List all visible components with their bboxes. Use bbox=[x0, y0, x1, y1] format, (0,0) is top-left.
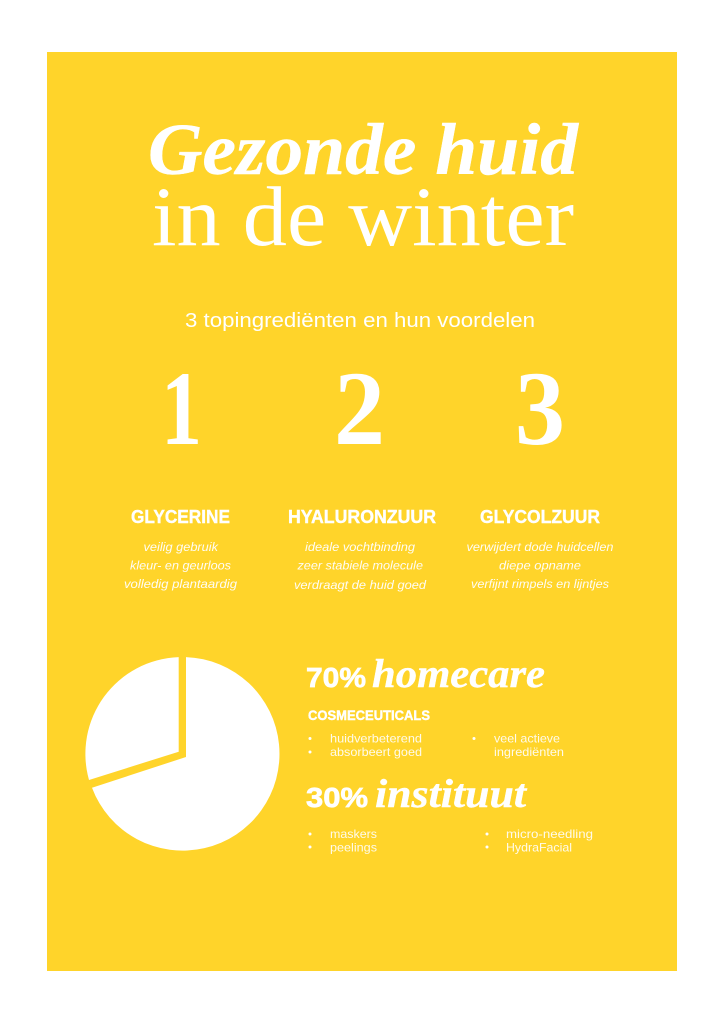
section: homecare: 70% bbox=[306, 662, 366, 693]
column: hyaluronzuur: ideale vochtbinding bbox=[305, 540, 415, 554]
column: glycolzuur: GLYCOLZUUR bbox=[480, 507, 600, 527]
section: instituut: HydraFacial bbox=[506, 840, 572, 854]
column: glycerine: 1 bbox=[161, 350, 202, 467]
column: hyaluronzuur: verdraagt de huid goed bbox=[294, 578, 426, 592]
yellow background panel bbox=[47, 52, 677, 971]
column: glycerine: GLYCERINE bbox=[131, 507, 230, 527]
section: instituut: micro-needling bbox=[506, 827, 593, 841]
column: glycerine: kleur- en geurloos bbox=[130, 558, 231, 572]
column: hyaluronzuur: zeer stabiele molecule bbox=[296, 558, 423, 572]
column: glycolzuur bbox=[466, 350, 614, 591]
section: homecare: homecare bbox=[372, 651, 545, 696]
section: instituut: maskers bbox=[330, 827, 377, 841]
section: homecare: ingrediënten bbox=[494, 745, 564, 759]
section: instituut bbox=[306, 771, 593, 854]
section: homecare: COSMECEUTICALS bbox=[308, 708, 430, 723]
column: hyaluronzuur bbox=[288, 350, 436, 592]
section: instituut: instituut bbox=[375, 771, 528, 816]
section: homecare: huidverbeterend bbox=[330, 732, 422, 746]
column: glycerine bbox=[124, 350, 237, 591]
column: hyaluronzuur: 2 bbox=[334, 350, 385, 467]
column: glycolzuur: 3 bbox=[515, 350, 565, 467]
title bbox=[148, 109, 580, 264]
pie chart 70/30 bbox=[85, 657, 279, 851]
section: instituut: 30% bbox=[306, 782, 368, 813]
section: homecare: absorbeert goed bbox=[330, 745, 422, 759]
subtitle: 3 topingrediënten en hun voordelen bbox=[185, 310, 535, 332]
column: hyaluronzuur: HYALURONZUUR bbox=[288, 507, 436, 527]
section: homecare bbox=[306, 651, 564, 759]
column: glycerine: volledig plantaardig bbox=[124, 577, 237, 591]
column: glycolzuur: verfijnt rimpels en lijntjes bbox=[471, 577, 609, 591]
title: in de winter bbox=[152, 170, 574, 264]
section: homecare: veel actieve bbox=[494, 732, 560, 746]
title: Gezonde huid bbox=[148, 109, 580, 190]
column: glycerine: veilig gebruik bbox=[144, 540, 219, 554]
section: instituut: peelings bbox=[330, 840, 377, 854]
column: glycolzuur: diepe opname bbox=[499, 558, 581, 572]
column: glycolzuur: verwijdert dode huidcellen bbox=[466, 540, 614, 554]
